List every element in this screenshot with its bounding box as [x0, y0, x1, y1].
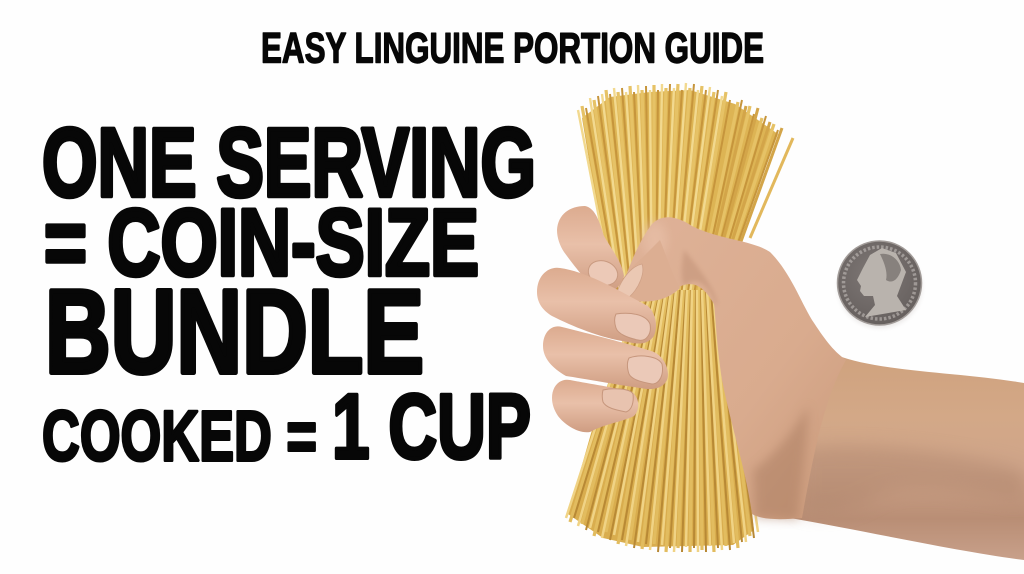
thumb crease shadow — [682, 250, 717, 306]
middle fingernail — [614, 313, 650, 340]
little finger — [552, 380, 638, 432]
illustration: linguine bundle held in a hand — [537, 83, 1024, 560]
wrist crease shadow — [753, 405, 808, 520]
line: equals coin-size: = COIN-SIZE — [44, 190, 479, 296]
coin lettering ring — [844, 247, 916, 319]
thumbnail — [617, 264, 643, 298]
ring finger — [543, 326, 668, 389]
value: 1 cup: 1 CUP — [332, 376, 531, 478]
forearm and wrist — [790, 355, 1024, 560]
linguine upper fan — [578, 83, 793, 305]
icon: quarter coin — [838, 241, 922, 328]
coin shadow — [838, 246, 922, 328]
cooked equals one cup — [42, 376, 531, 478]
ring fingernail — [628, 356, 663, 384]
coin face — [838, 241, 922, 325]
index finger — [557, 206, 624, 292]
headline: one serving equals coin-size bundle — [42, 108, 536, 398]
line: one serving: ONE SERVING — [42, 108, 536, 217]
index fingernail — [585, 257, 621, 289]
label: cooked equals: COOKED = — [42, 398, 317, 476]
title: EASY LINGUINE PORTION GUIDE — [261, 24, 764, 72]
thumb — [617, 240, 680, 302]
coin portrait hair shading — [880, 254, 901, 282]
knuckle highlight — [643, 222, 667, 258]
linguine lower fan — [566, 290, 758, 552]
line: bundle: BUNDLE — [45, 266, 424, 398]
forearm shading — [800, 446, 1024, 513]
palm and back of hand — [620, 217, 846, 520]
middle finger — [537, 268, 656, 344]
little fingernail — [602, 389, 633, 412]
coin portrait — [857, 248, 906, 317]
